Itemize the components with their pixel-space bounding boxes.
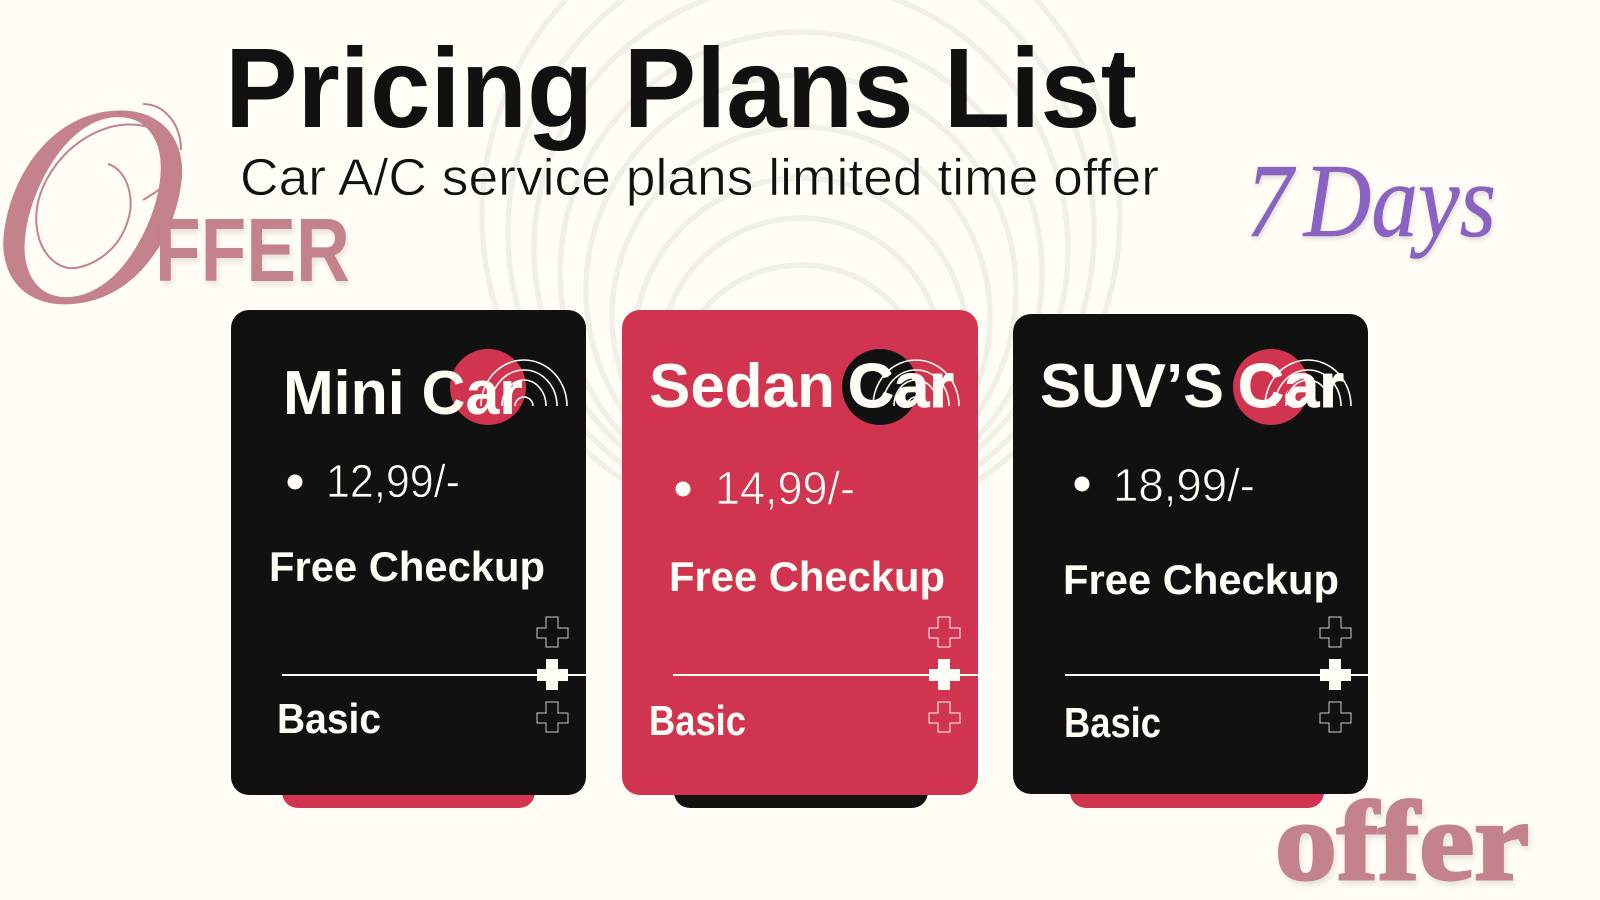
bullet — [676, 482, 690, 496]
card background — [622, 310, 978, 795]
decorative word: OFFER: FFER — [155, 201, 350, 301]
panel: Mini Car plan — [231, 310, 586, 808]
bullet — [1074, 476, 1090, 492]
icon: outline plus — [929, 702, 960, 732]
plan name: Sedan — [649, 352, 835, 421]
icon: rainbow arcs — [481, 360, 567, 406]
tier label: Basic — [649, 697, 746, 744]
feature: Free Checkup — [1063, 556, 1339, 603]
icon: circle — [450, 349, 526, 425]
plan name: Car: Car — [1238, 352, 1344, 421]
icon: solid plus — [929, 659, 960, 690]
icon: solid plus — [1320, 659, 1351, 690]
tab under card — [1070, 770, 1324, 808]
icon: rainbow arcs — [1265, 360, 1351, 406]
background concentric rings — [482, 0, 1120, 534]
icon: outline plus — [1320, 702, 1351, 732]
divider — [673, 674, 978, 676]
icon: circle — [842, 349, 918, 425]
icon: outline plus — [929, 617, 960, 647]
icon: outline plus — [537, 702, 568, 732]
panel: Sedan Car plan — [622, 310, 978, 808]
plan name: Mini Car — [283, 359, 523, 428]
title: Pricing Plans List — [225, 25, 1137, 151]
plan name: SUV’S — [1040, 352, 1224, 421]
feature: Free Checkup — [269, 543, 545, 590]
divider — [1065, 674, 1368, 676]
divider — [282, 674, 586, 676]
icon: circle — [1233, 349, 1309, 425]
card background — [231, 310, 586, 795]
price: 12,99/- — [326, 455, 460, 507]
subtitle: Car A/C service plans limited time offer — [240, 149, 1159, 207]
icon: outline plus — [1320, 617, 1351, 647]
price: 18,99/- — [1113, 459, 1255, 511]
feature: Free Checkup — [669, 553, 945, 600]
bullet — [288, 474, 302, 490]
decorative text: 7 Days: 7 Days — [1246, 142, 1496, 259]
card background — [1013, 314, 1368, 794]
tier label: Basic — [277, 695, 381, 742]
tier label: Basic — [1064, 699, 1161, 746]
tab under card — [282, 770, 535, 808]
plan name: Car: Car — [848, 352, 954, 421]
tab under card — [674, 770, 928, 808]
price: 14,99/- — [715, 462, 855, 514]
icon: solid plus — [537, 659, 568, 690]
decorative word: OFFER — [0, 40, 350, 368]
panel: SUV'S Car plan — [1013, 314, 1368, 808]
icon: outline plus — [537, 617, 568, 647]
icon: rainbow arcs — [873, 360, 959, 406]
